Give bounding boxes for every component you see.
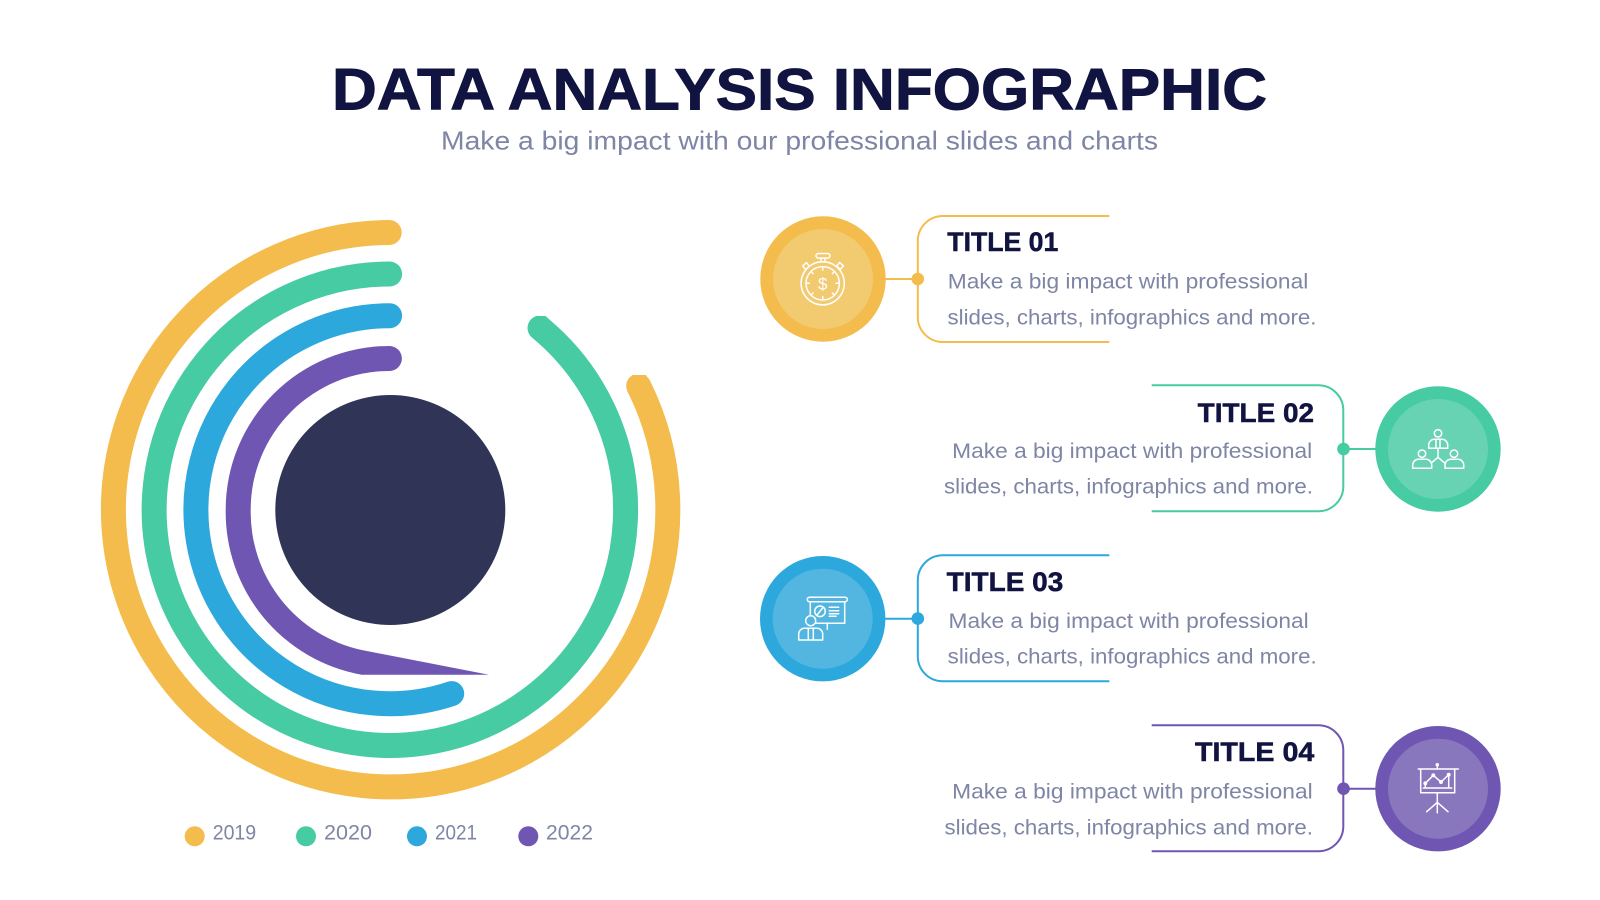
connector dot (1337, 443, 1350, 455)
connector frame (1152, 385, 1376, 511)
badge circle (1375, 386, 1501, 512)
legend item: 2022: 2022 (546, 821, 593, 844)
icon: presenter (799, 597, 847, 640)
icon: stopwatch (801, 254, 844, 305)
body text: Make a big impact with professional (952, 440, 1312, 463)
heading: TITLE 01 (947, 227, 1058, 257)
body text (944, 440, 1313, 498)
panel: title 02 (944, 385, 1501, 512)
ring: 2021 (196, 316, 452, 704)
icon: stopwatch: $ (818, 274, 828, 294)
body text: slides, charts, infographics and more. (944, 816, 1313, 840)
badge circle (760, 556, 885, 681)
body text (948, 270, 1316, 330)
legend item: 2021: 2021 (435, 821, 477, 844)
panel: title 01 (760, 216, 1316, 342)
connector frame (1152, 725, 1376, 851)
heading: TITLE 02 (1198, 398, 1314, 428)
body text (944, 780, 1313, 840)
body text: slides, charts, infographics and more. (948, 306, 1316, 330)
connector dot (1337, 782, 1350, 795)
legend item: 2021 (407, 821, 477, 846)
connector dot (912, 273, 924, 285)
legend item: 2019: 2019 (213, 821, 256, 844)
badge circle (760, 216, 886, 342)
ring: 2022 (226, 346, 489, 675)
heading: TITLE 03 (947, 567, 1063, 597)
body text: Make a big impact with professional (952, 780, 1313, 804)
connector frame (885, 216, 1109, 342)
icon: team hierarchy (1413, 430, 1464, 468)
subtitle: Make a big impact with our professional slides and charts (441, 126, 1158, 156)
center circle (275, 395, 505, 625)
body text (948, 610, 1317, 668)
ring: 2019 (113, 232, 668, 787)
legend item: 2020 (296, 821, 372, 846)
panel: title 04 (944, 725, 1501, 851)
body text: slides, charts, infographics and more. (944, 476, 1313, 498)
body text: Make a big impact with professional (948, 270, 1308, 294)
badge circle (1375, 726, 1501, 851)
legend item: 2022 (518, 821, 593, 846)
legend item: 2020: 2020 (324, 821, 372, 844)
ring: 2020 (154, 274, 626, 745)
heading: TITLE 04 (1195, 737, 1314, 767)
connector frame (885, 555, 1109, 681)
connector dot (912, 612, 924, 625)
legend (185, 821, 593, 846)
icon: chart board (1418, 764, 1458, 813)
body text: slides, charts, infographics and more. (948, 646, 1317, 668)
panel: title 03 (760, 555, 1317, 681)
legend item: 2019 (185, 821, 256, 846)
radial bar chart (113, 232, 668, 787)
title: DATA ANALYSIS INFOGRAPHIC (332, 57, 1267, 122)
body text: Make a big impact with professional (948, 610, 1309, 633)
